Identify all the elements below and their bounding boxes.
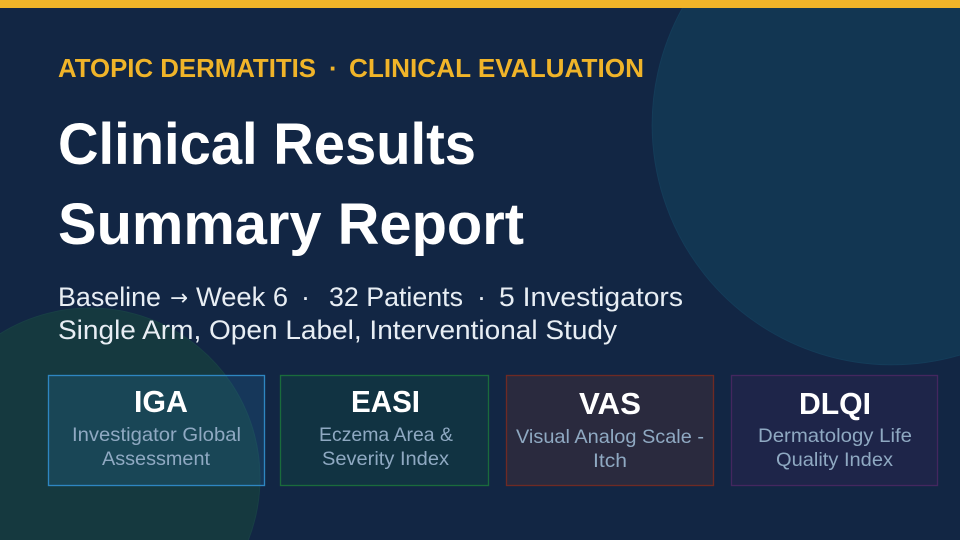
card: IGA: Assessment [102,448,211,470]
study description: Baseline [58,282,161,312]
card: EASI: Severity Index [322,448,449,470]
study description: · [477,282,486,312]
eyebrow heading [58,53,644,83]
top accent bar [0,0,960,8]
study description [58,282,683,345]
card: EASI [280,376,488,486]
card: VAS: Itch [593,450,627,472]
study description: Single Arm, Open Label, Interventional Study [58,315,618,345]
card: VAS: VAS [579,386,641,421]
study description: · [301,282,310,312]
title [58,112,524,257]
card: DLQI [732,376,938,486]
card: EASI: EASI [351,384,420,419]
title: Summary Report [58,192,524,257]
card: VAS: Visual Analog Scale - [516,426,704,448]
study description: 5 Investigators [499,282,683,312]
card: VAS [506,376,714,486]
eyebrow heading: · [329,53,338,83]
card: DLQI: Dermatology Life [758,425,912,447]
title: Clinical Results [58,112,476,177]
background circle: bottom left [0,308,260,540]
card: IGA: IGA [134,384,188,419]
background circle: top right [652,8,960,365]
eyebrow heading: ATOPIC DERMATITIS [58,53,316,83]
card: EASI: Eczema Area & [319,424,453,446]
study description: 32 Patients [329,282,463,312]
card: IGA [48,376,264,486]
card: DLQI: Quality Index [776,449,893,471]
card: IGA: Investigator Global [72,424,241,446]
card: DLQI: DLQI [799,386,871,421]
study description: Week 6 [196,282,288,312]
eyebrow heading: CLINICAL EVALUATION [349,53,644,83]
study description: → [170,286,188,311]
